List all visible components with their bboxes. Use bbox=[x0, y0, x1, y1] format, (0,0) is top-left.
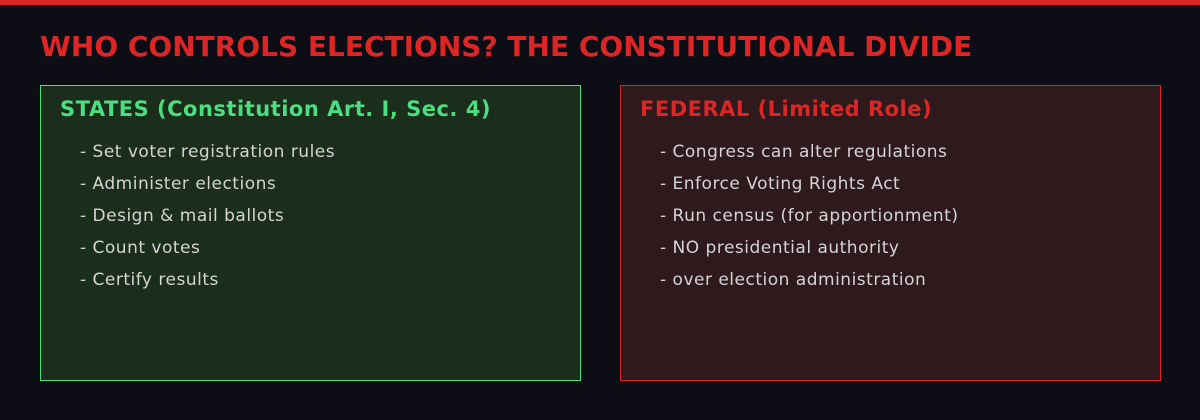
list: federal powers bbox=[660, 142, 958, 290]
panel: states bbox=[40, 85, 581, 381]
list: state powers: - Design & mail ballots bbox=[80, 206, 284, 226]
list: federal powers: - NO presidential authority bbox=[660, 238, 899, 258]
list: state powers: - Count votes bbox=[80, 238, 200, 258]
title: WHO CONTROLS ELECTIONS? THE CONSTITUTIONAL DIVIDE bbox=[40, 30, 972, 63]
list: federal powers: - Enforce Voting Rights Act bbox=[660, 174, 900, 194]
heading: states: STATES (Constitution Art. I, Sec. 4) bbox=[60, 97, 491, 121]
list: federal powers: - Run census (for apportionment) bbox=[660, 206, 958, 226]
list: state powers: - Set voter registration rules bbox=[80, 142, 335, 162]
heading: federal: FEDERAL (Limited Role) bbox=[640, 97, 932, 121]
list: state powers: - Certify results bbox=[80, 270, 219, 290]
list: federal powers: - Congress can alter regulations bbox=[660, 142, 947, 162]
list: state powers: - Administer elections bbox=[80, 174, 276, 194]
list: federal powers: - over election administration bbox=[660, 270, 926, 290]
list: state powers bbox=[80, 142, 335, 290]
panel: federal bbox=[620, 85, 1161, 381]
